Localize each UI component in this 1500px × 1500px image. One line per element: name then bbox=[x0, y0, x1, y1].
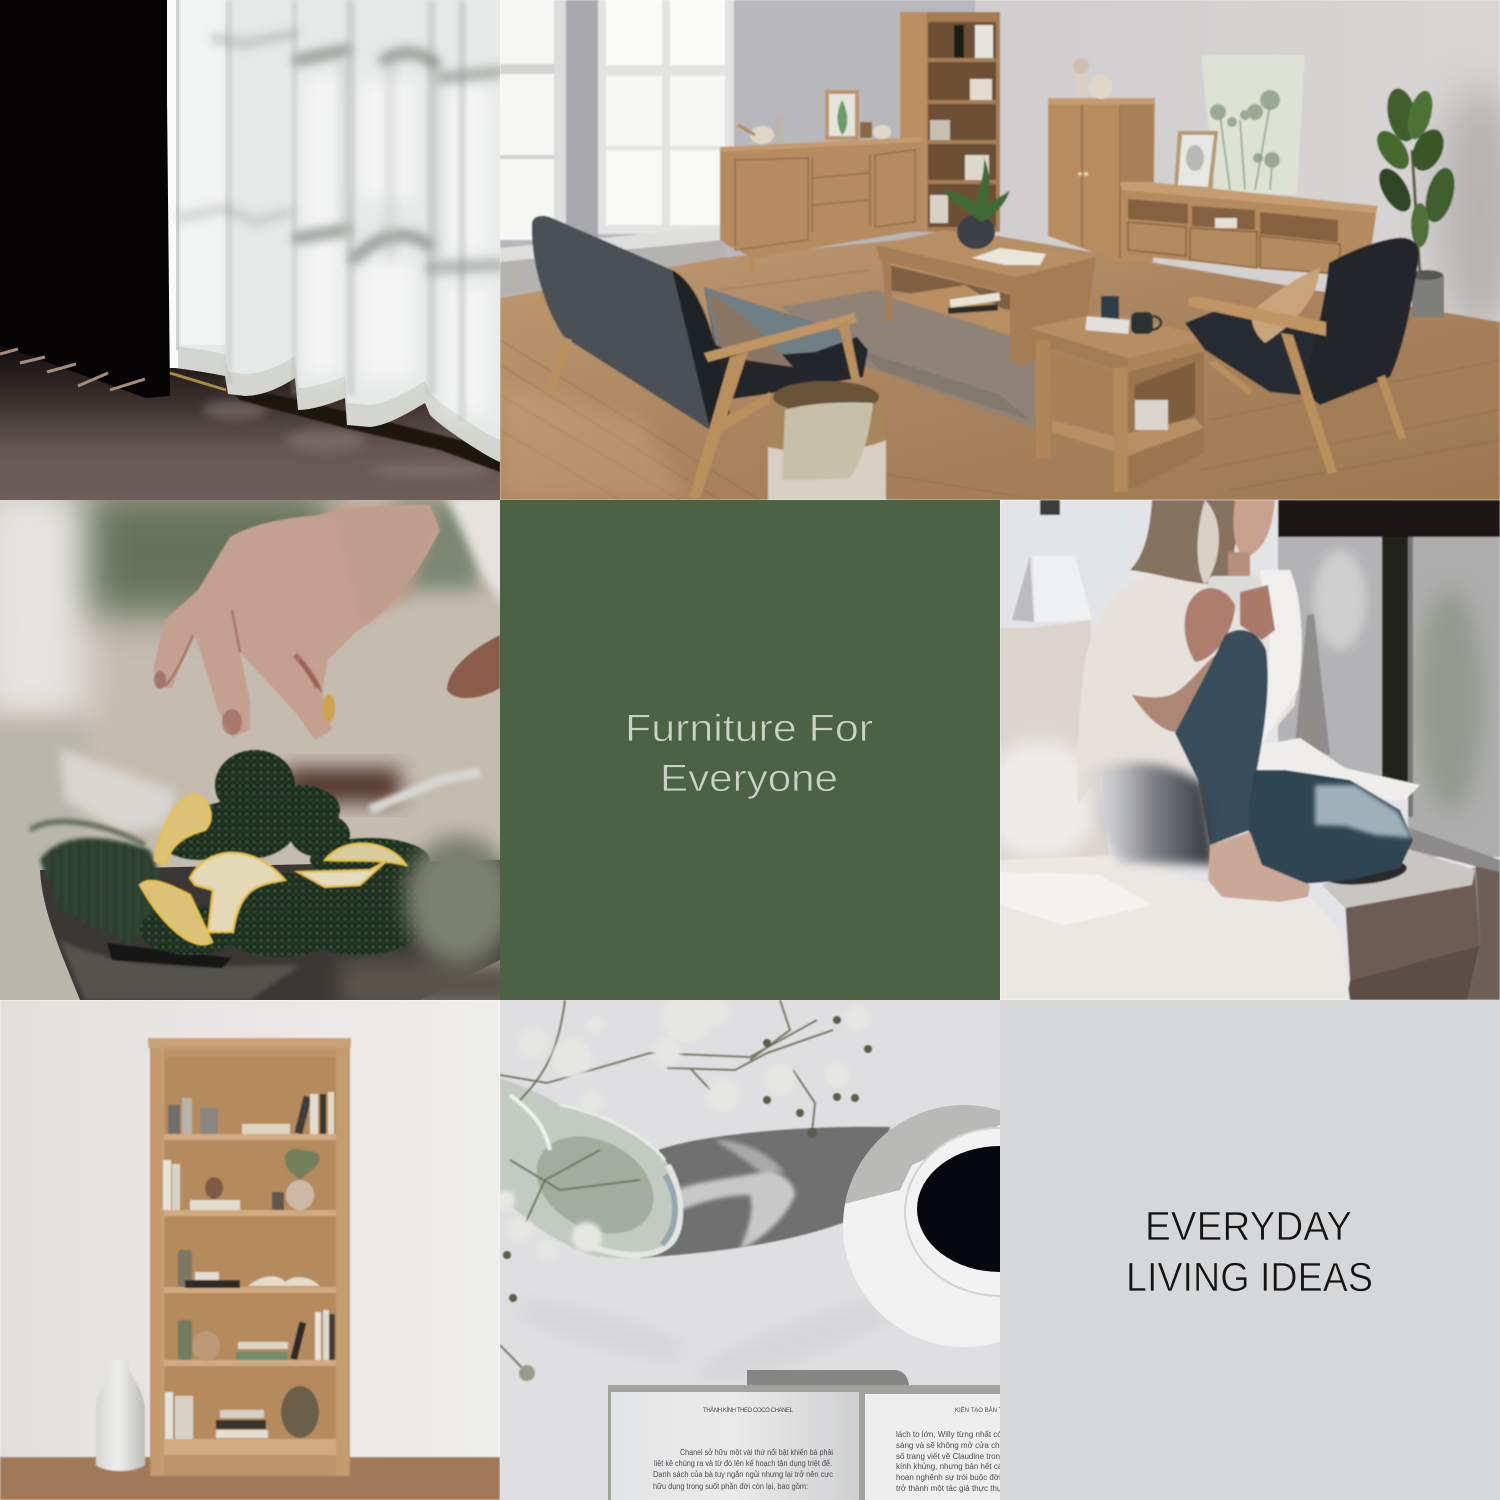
saucer and cup bbox=[840, 1100, 1095, 1347]
left sofa bbox=[532, 216, 868, 498]
book text bbox=[653, 1407, 1022, 1493]
heading: furniture for: Furniture For bbox=[625, 708, 873, 750]
spider plant on table bbox=[942, 158, 1010, 249]
sofa seat and frame bbox=[1322, 828, 1500, 1000]
panel: cooking photo bbox=[0, 490, 520, 1010]
wardrobe bbox=[1048, 98, 1155, 262]
blanket bbox=[1000, 855, 1350, 1000]
heading: everyday: EVERYDAY bbox=[1145, 1203, 1352, 1249]
books on lower shelf bbox=[948, 293, 1000, 314]
book text: kính khủng, nhưng bản hết các nhà bbox=[896, 1462, 1022, 1471]
grey back cushion bbox=[1295, 614, 1330, 755]
brass rod bbox=[170, 373, 226, 390]
woven basket bbox=[768, 381, 886, 500]
coffee table bbox=[876, 230, 1096, 365]
skillet bbox=[40, 860, 500, 1000]
white pillow bbox=[1258, 738, 1420, 800]
book text: Chanel sở hữu một vài thứ nổi bật khiến bà phải bbox=[680, 1448, 833, 1457]
book text: KIẾN TẠO BẢN THÂN bbox=[955, 1407, 1015, 1414]
light slits on carpet bbox=[0, 349, 145, 390]
background table blur bbox=[285, 768, 400, 803]
book text: hữu dụng trong suốt phần đời còn lại, bao gồm: bbox=[653, 1482, 808, 1491]
panel: woman with mug photo bbox=[980, 500, 1500, 1000]
panel: curtain photo bbox=[0, 0, 500, 500]
right armchair bbox=[1185, 238, 1419, 474]
panel: living room photo bbox=[500, 0, 1500, 500]
sideboard decor bbox=[738, 90, 891, 144]
bookcase body bbox=[148, 1038, 351, 1476]
second hand bbox=[447, 635, 500, 698]
sofa cushions bbox=[1000, 620, 1110, 870]
framed print bbox=[1174, 131, 1218, 191]
shelf items bbox=[163, 1092, 335, 1439]
TV unit bbox=[1120, 182, 1378, 278]
knife blade bbox=[60, 748, 175, 832]
book text: liệt kê chúng ra và từ đó lên kế hoạch tận dụng triệt để. bbox=[654, 1459, 832, 1468]
book text: THÀNH KÍNH THEO COCO CHANEL bbox=[703, 1407, 794, 1414]
book text: trở thành một tác giả thực thụ v bbox=[896, 1484, 1008, 1493]
fork bbox=[370, 772, 480, 810]
window left bbox=[500, 0, 554, 240]
panel: coffee and vase still life bbox=[495, 992, 1095, 1500]
sideboard bbox=[720, 137, 921, 272]
heading: everyone: Everyone bbox=[660, 758, 838, 800]
book text: lách to lớn, Willy từng nhất có bbox=[896, 1430, 1002, 1439]
glass vase bbox=[500, 1078, 680, 1258]
side table bbox=[1029, 312, 1214, 492]
gypsophila sprigs bbox=[495, 992, 872, 1381]
fiddle leaf plant bbox=[1376, 88, 1456, 318]
tall bookcase bbox=[900, 12, 1000, 232]
curtain hem bbox=[175, 346, 500, 462]
rug bbox=[780, 290, 1035, 428]
heading: living ideas: LIVING IDEAS bbox=[1126, 1254, 1373, 1300]
sheer white curtain bbox=[168, 0, 500, 440]
mugs and books on side table bbox=[1085, 296, 1161, 334]
window right bbox=[598, 0, 734, 234]
chef hand bbox=[153, 503, 440, 740]
dark curtain edge bbox=[0, 101, 170, 398]
carpet floor bbox=[0, 340, 500, 500]
panel: bookcase photo bbox=[0, 1000, 500, 1500]
white vase bbox=[96, 1360, 145, 1471]
panel: green title block bbox=[500, 500, 1000, 1000]
woman bbox=[1070, 500, 1413, 902]
wall bracket shape bbox=[1012, 500, 1092, 622]
wall bbox=[500, 0, 980, 320]
botanical canvas bbox=[1201, 55, 1305, 195]
lemon slices bbox=[140, 795, 406, 944]
window background bbox=[1278, 537, 1382, 837]
shadow of vase bbox=[640, 1127, 890, 1258]
window shadows on curtain bbox=[180, 34, 500, 268]
book text: sáng và sẽ không mở cửa cho đến bbox=[896, 1441, 1020, 1450]
panel: grey caption block bbox=[1000, 1000, 1500, 1500]
book text: hoan nghênh sự trói buộc đời. Co bbox=[896, 1473, 1016, 1482]
kale and broccoli bbox=[30, 750, 515, 965]
open book bbox=[608, 1370, 1022, 1500]
gap below curtain bbox=[225, 385, 500, 472]
book text: Danh sách của bà tuy ngắn ngủi nhưng lại trở nên cực bbox=[653, 1470, 833, 1479]
floor bbox=[500, 232, 1500, 500]
vases on wardrobe bbox=[1073, 58, 1113, 99]
open book on table bbox=[972, 248, 1046, 265]
book text: số trang viết về Claudine trong một bbox=[896, 1452, 1021, 1461]
